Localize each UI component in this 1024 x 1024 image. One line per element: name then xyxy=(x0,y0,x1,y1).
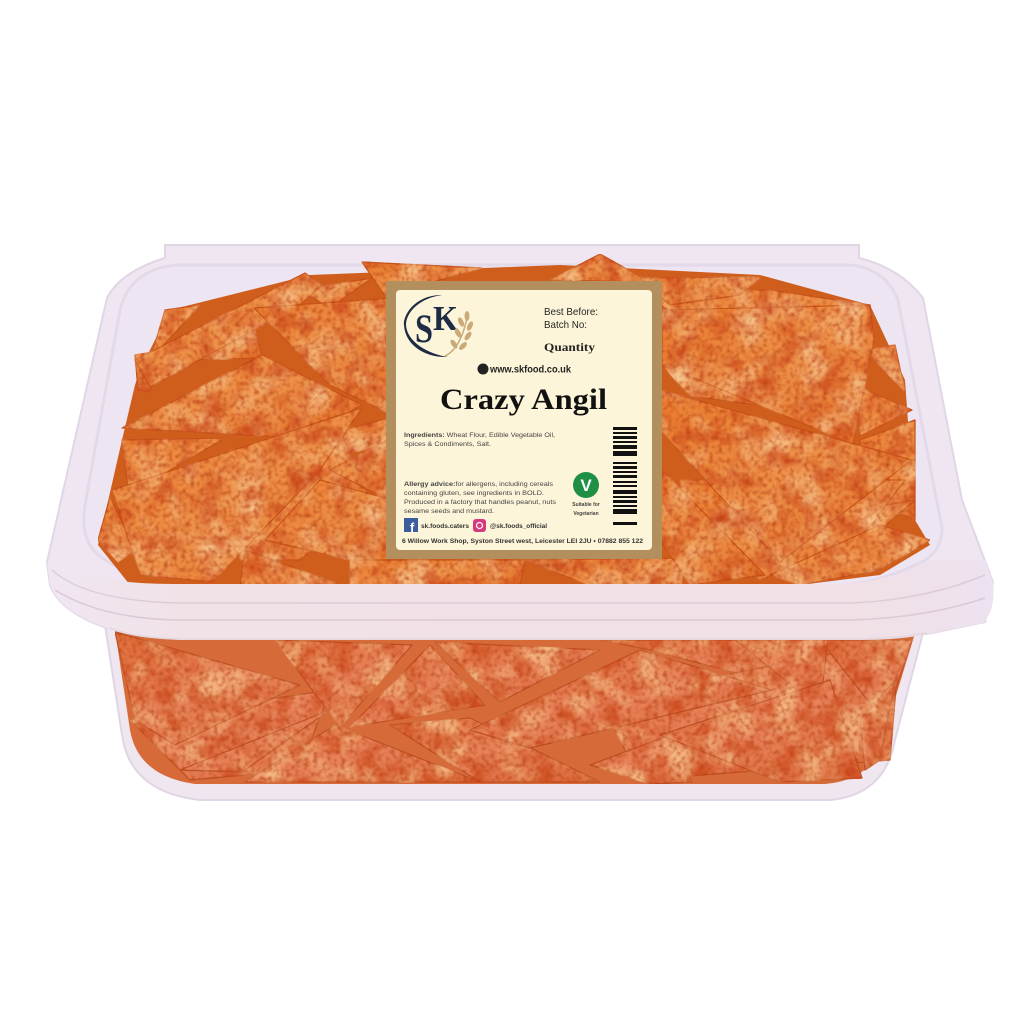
tub base xyxy=(105,625,925,800)
allergy advice xyxy=(404,481,557,515)
upper chips inside lid xyxy=(98,254,930,586)
vegetarian badge xyxy=(572,472,600,517)
barcode xyxy=(613,427,637,525)
lid rim xyxy=(47,560,994,640)
tub lid xyxy=(47,245,993,634)
shadow beneath upper chips xyxy=(98,265,930,585)
vegetarian badge: Vegetarian xyxy=(573,511,599,517)
allergy advice: Produced in a factory that handles peanut, nuts xyxy=(404,499,557,506)
best before and batch fields: Batch No: xyxy=(544,319,587,331)
vegetarian badge: V xyxy=(580,476,592,495)
best before and batch fields xyxy=(544,306,598,331)
lower chips seen through tub xyxy=(115,632,912,784)
ingredients xyxy=(404,432,555,448)
vegetarian badge: Suitable for xyxy=(572,502,600,508)
allergy advice: sesame seeds and mustard. xyxy=(404,508,494,515)
website: www.skfood.co.uk xyxy=(489,364,571,376)
social icons and handles: @sk.foods_official xyxy=(490,524,547,530)
address line: 6 Willow Work Shop, Syston Street west, Leicester LEI 2JU • 07882 855 122 xyxy=(402,538,643,545)
quantity: Quantity xyxy=(544,340,595,354)
SK logo: K xyxy=(433,299,458,338)
social icons and handles: sk.foods.caters xyxy=(421,524,470,530)
ingredients: Spices & Condiments, Salt. xyxy=(404,441,491,448)
product label xyxy=(386,281,662,559)
social icons and handles xyxy=(404,518,547,535)
social icons and handles: f xyxy=(410,520,415,535)
best before and batch fields: Best Before: xyxy=(544,306,598,318)
SK logo: S xyxy=(415,306,433,351)
SK logo xyxy=(404,295,474,357)
product name: Crazy Angil xyxy=(440,383,607,416)
label background xyxy=(386,281,662,559)
allergy advice: containing gluten, see ingredients in BOLD. xyxy=(404,490,544,497)
allergy advice: Allergy advice: for allergens, including cereals xyxy=(404,481,554,488)
ingredients: Ingredients: Wheat Flour, Edible Vegetable Oil, xyxy=(404,432,555,439)
